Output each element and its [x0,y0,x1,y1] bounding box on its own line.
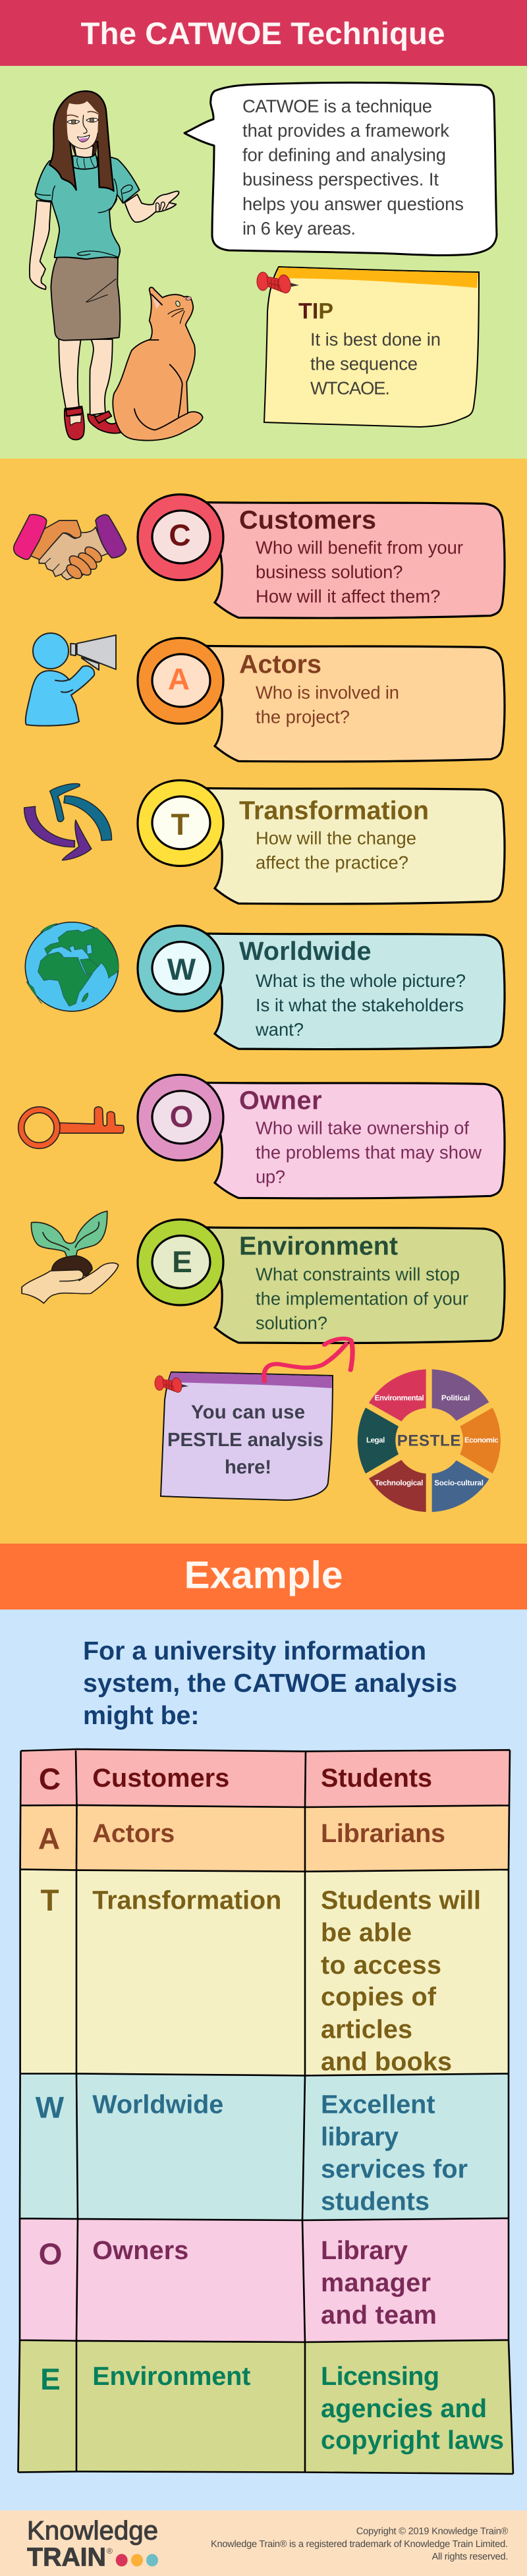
row: Owners: Library [321,2236,408,2265]
row: Worldwide: Excellent [321,2090,435,2119]
speech bubble: CATWOE is a technique [242,96,432,116]
chart: PESTLE wheel: Economic [464,1436,499,1444]
item: Transformation: How will the change [256,827,416,848]
row: Actors: Librarians [321,1819,445,1848]
item: Worldwide: W [167,952,196,986]
example intro text: For a university information [83,1637,426,1666]
item: Actors: Actors [239,650,321,679]
logo: Knowledge Train: TRAIN [27,2543,106,2572]
speech bubble: for defining and analysing [242,145,446,165]
footer [0,2510,527,2576]
tip body [310,329,441,399]
item: Transformation: Transformation [239,796,429,825]
example banner [0,1544,527,1610]
example intro text [83,1637,457,1730]
item: Customers: How will it affect them? [256,586,440,606]
icon: red push pin [257,272,299,294]
chart: PESTLE wheel: Socio-cultural [434,1479,484,1487]
tip body: the sequence [310,354,418,374]
copyright notice: Copyright © 2019 Knowledge Train® [356,2527,509,2537]
icon: circular transformation arrows [24,783,111,860]
row: Worldwide: services for [321,2154,468,2183]
item: Owner: Who will take ownership of [256,1117,469,1138]
icon: seedling in hand [22,1211,119,1303]
row: Environment: agencies and [321,2394,487,2423]
item: Customers: business solution? [256,561,403,582]
note text [167,1401,323,1478]
item: Owner: up? [256,1166,285,1187]
item: Environment: solution? [256,1313,327,1333]
item: Environment: What constraints will stop [256,1264,460,1285]
row: Environment: E [40,2362,61,2396]
item: Worldwide: Is it what the stakeholders [256,995,464,1015]
item: Owner: O [170,1099,193,1133]
illustration: woman presenting [30,91,179,439]
example intro text: system, the CATWOE analysis [83,1669,457,1698]
speech bubble: in 6 key areas. [242,218,356,238]
item: Actors: Who is involved in [256,682,399,702]
speech bubble: that provides a framework [242,121,449,141]
item: Environment [138,1219,505,1343]
row: Owners: Owners [92,2236,188,2265]
item: Owner: the problems that may show [256,1142,482,1162]
icon: red push pin [155,1376,188,1393]
chart: PESTLE wheel: Legal [366,1436,385,1444]
tip heading: TIP [298,299,333,324]
item: Actors: A [168,661,190,696]
title banner: The CATWOE Technique [80,16,445,51]
chart: PESTLE wheel [358,1369,501,1512]
item: Customers [138,494,505,618]
tip sticky note [257,267,479,427]
item: Worldwide: What is the whole picture? [256,970,466,991]
row: Customers [20,1749,510,1807]
item: Worldwide: Worldwide [239,937,372,966]
row: Customers: C [39,1762,61,1796]
icon: handshake [14,515,126,581]
tip body: It is best done in [310,329,441,350]
row: Actors: A [38,1822,60,1856]
item: Actors: the project? [256,706,350,727]
item: Actors [138,638,505,762]
row: Worldwide: W [36,2090,65,2125]
row: Transformation: and books [321,2048,452,2077]
row: Owners: O [39,2237,62,2271]
item: Transformation [138,780,505,904]
item: Owner [138,1075,505,1198]
logo: Knowledge Train: Knowledge [27,2517,158,2546]
copyright notice: Knowledge Train® is a registered trademark of Knowledge Train Limited. [211,2539,508,2550]
row: Owners [20,2218,509,2342]
item: Worldwide [138,926,505,1050]
item: Environment: E [172,1245,192,1279]
copyright notice [211,2527,509,2562]
icon: person with megaphone [26,633,116,726]
row: Transformation: to access [321,1951,441,1980]
row: Transformation: Transformation [92,1886,281,1915]
chart: PESTLE wheel: PESTLE [397,1432,460,1449]
tip body: WTCAOE. [310,378,390,399]
row: Transformation: T [40,1883,59,1917]
row: Worldwide: Worldwide [92,2090,223,2119]
row: Environment: copyright laws [321,2426,504,2455]
example intro text: might be: [83,1701,199,1730]
table: CATWOE example [18,1749,513,2474]
row: Transformation: Students will [321,1886,481,1915]
row: Actors: Actors [92,1819,175,1848]
item: Transformation: T [171,807,190,841]
title banner [0,0,527,66]
speech bubble: business perspectives. It [242,169,439,190]
arrow: note to Environment [264,1339,352,1381]
row: Customers: Customers [92,1764,229,1793]
note text: PESTLE analysis [167,1429,323,1451]
item: Customers: C [169,518,191,552]
row: Transformation: articles [321,2015,412,2044]
example banner: Example [184,1554,343,1597]
logo: Knowledge Train [27,2517,158,2572]
illustration: orange cat [113,287,203,441]
note text: You can use [191,1401,305,1423]
row: Transformation: be able [321,1918,412,1947]
item: Worldwide: want? [255,1019,304,1040]
item: Customers: Who will benefit from your [256,538,463,557]
row: Environment: Environment [92,2362,250,2391]
item: Owner: Owner [239,1086,321,1115]
speech bubble [184,83,497,256]
row: Environment: Licensing [321,2362,439,2391]
icon: key [18,1107,124,1148]
row: Worldwide [20,2074,509,2220]
row: Actors [20,1805,509,1872]
row: Worldwide: library [321,2123,399,2152]
item: Transformation: affect the practice? [256,852,408,872]
chart: PESTLE wheel: Political [441,1395,470,1403]
row: Worldwide: students [321,2187,430,2216]
row: Customers: Students [321,1764,432,1793]
chart: PESTLE wheel: Technological [375,1479,423,1487]
copyright notice: All rights reserved. [432,2552,508,2562]
note text: here! [225,1457,271,1478]
item: Environment: the implementation of your [256,1289,468,1308]
item: Customers: Customers [239,506,376,535]
icon: globe [25,922,119,1011]
row: Transformation [20,1869,509,2077]
row: Owners: and team [321,2301,437,2330]
speech bubble: helps you answer questions [242,194,464,214]
row: Environment [18,2340,513,2474]
chart: PESTLE wheel: Environmental [375,1395,424,1403]
row: Transformation: copies of [321,1982,437,2011]
logo: Knowledge Train: ® [107,2546,113,2556]
row: Owners: manager [321,2268,431,2297]
PESTLE sticky note [155,1372,333,1500]
item: Environment: Environment [239,1232,398,1261]
